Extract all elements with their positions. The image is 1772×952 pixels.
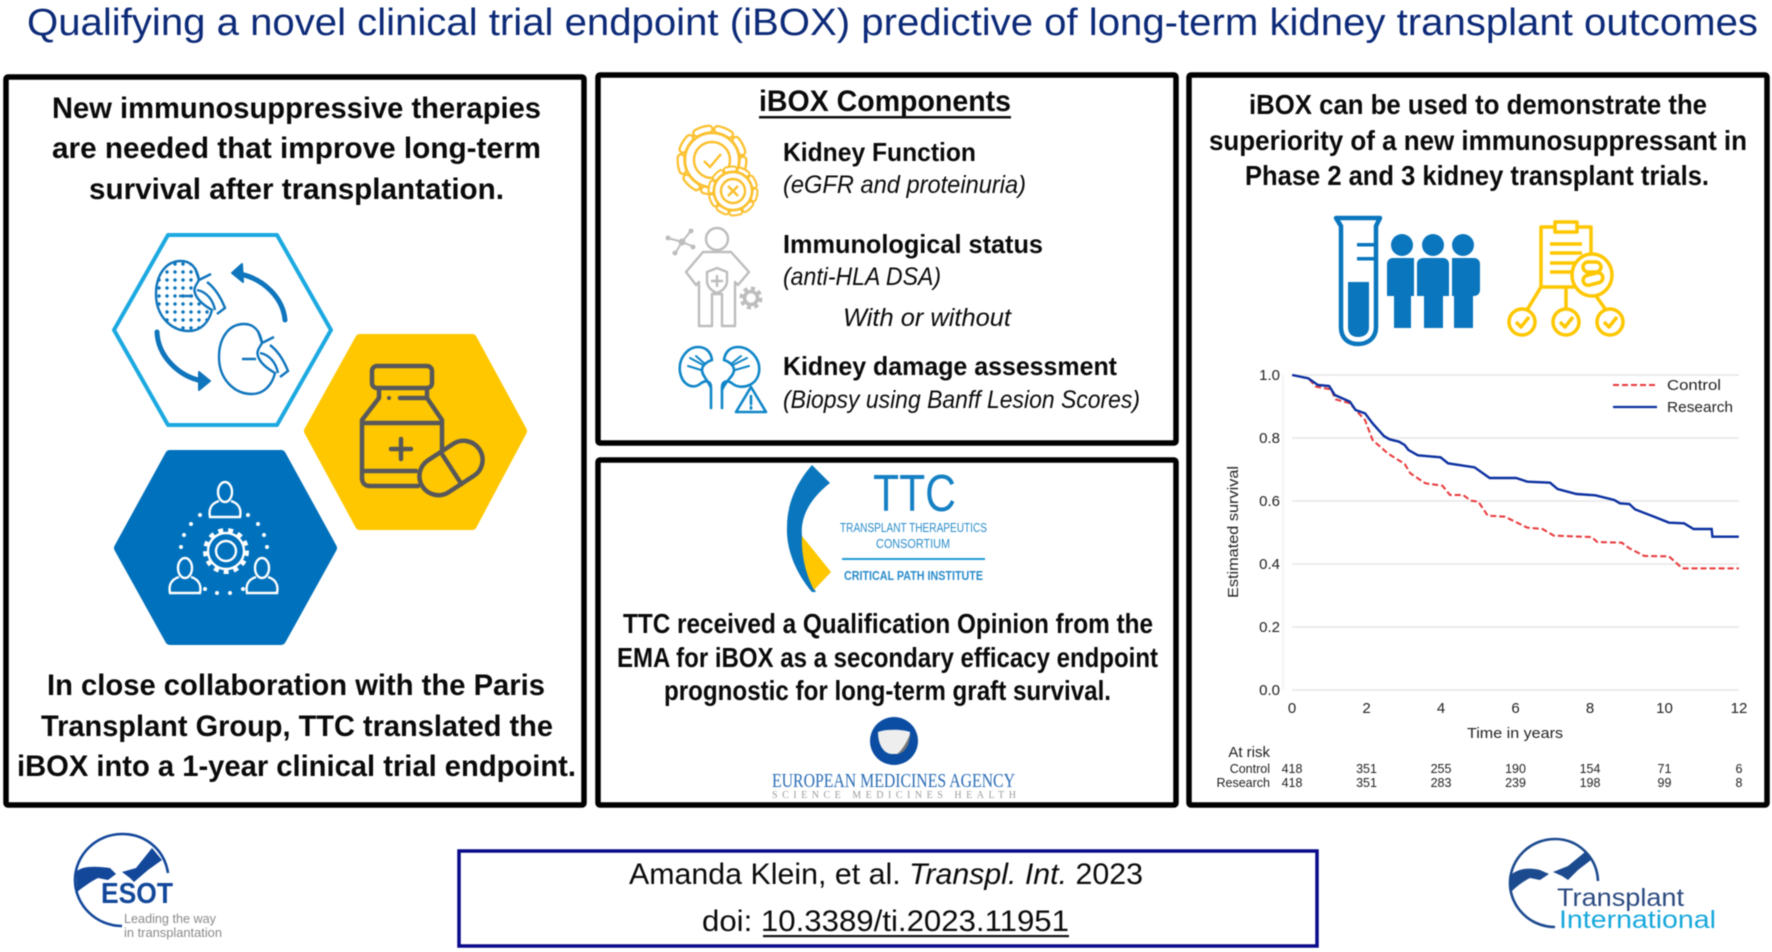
text block: kidney damage assessment: Kidney damage assessment <box>783 351 1117 381</box>
panel: TTC qualification opinion <box>598 460 1176 805</box>
text block: qualification opinion <box>617 608 1158 706</box>
y axis tick labels: 0.4 <box>1259 556 1280 573</box>
citation box <box>459 851 1317 946</box>
at risk table: 99 <box>1658 776 1671 790</box>
panel: need for new therapies <box>6 77 584 805</box>
heading: iBOX Components: iBOX Components <box>759 85 1011 118</box>
logo: ESOT: ESOT <box>101 878 173 910</box>
at risk table: 351 <box>1356 776 1377 790</box>
text block: kidney damage assessment <box>783 351 1140 414</box>
at risk table: 239 <box>1505 776 1526 790</box>
y axis tick labels: 0.0 <box>1259 682 1280 699</box>
x axis tick labels <box>1288 700 1747 717</box>
text block: immunological status: (anti-HLA DSA) <box>783 263 941 291</box>
x axis tick labels: 8 <box>1586 700 1594 717</box>
icon: test tube <box>1336 218 1380 344</box>
legend: Control <box>1667 377 1721 394</box>
text block: kidney function: (eGFR and proteinuria) <box>783 171 1026 199</box>
at risk table: Control <box>1230 762 1270 776</box>
text block: qualification opinion: prognostic for long-term graft survival. <box>664 675 1111 706</box>
y axis tick labels <box>1259 367 1280 699</box>
at risk table: At risk <box>1228 744 1270 761</box>
text block: therapies needed <box>52 92 541 206</box>
text block: superiority: Phase 2 and 3 kidney transplant trials. <box>1245 160 1709 191</box>
text block: therapies needed: are needed that improve long-term <box>52 132 541 165</box>
icon: three people <box>1387 234 1480 328</box>
at risk table: 71 <box>1658 762 1671 776</box>
at risk table: 154 <box>1580 762 1600 776</box>
legend: Research <box>1667 399 1733 416</box>
x axis tick labels: 2 <box>1362 700 1371 717</box>
x axis tick labels: 12 <box>1731 700 1747 717</box>
at risk table: 190 <box>1505 762 1526 776</box>
y axis tick labels: 0.8 <box>1259 430 1280 447</box>
icon: collaboration hexagon <box>119 455 332 640</box>
text block: TTC collaboration: Transplant Group, TTC translated the <box>41 710 553 743</box>
curve: research <box>1292 375 1739 537</box>
icon: kidney exchange hexagon <box>114 235 331 425</box>
legend <box>1613 377 1733 416</box>
icon: person immune status <box>666 228 760 326</box>
text block: kidney function: Kidney Function <box>783 137 976 167</box>
panel: superiority and survival chart <box>1189 75 1767 805</box>
logo: Transplant International: Transplant <box>1557 884 1684 912</box>
panel: iBOX components <box>598 75 1176 443</box>
logo: ESOT: in transplantation <box>124 925 222 940</box>
curve: control <box>1292 375 1739 568</box>
y axis title: Estimated survival <box>1225 466 1242 598</box>
x axis tick labels: 0 <box>1288 700 1296 717</box>
text block: qualification opinion: EMA for iBOX as a secondary efficacy endpoint <box>617 642 1158 673</box>
text block: immunological status: Immunological status <box>783 229 1043 259</box>
at risk table <box>1216 744 1743 790</box>
text block: superiority: iBOX can be used to demonstrate the <box>1249 89 1707 120</box>
doi text: doi: 10.3389/ti.2023.11951 <box>702 905 1069 938</box>
x axis title: Time in years <box>1467 725 1563 742</box>
at risk table: Research <box>1216 776 1270 790</box>
icon: clipboard with pills <box>1509 222 1623 335</box>
at risk table: 6 <box>1736 762 1743 776</box>
at risk table: 198 <box>1580 776 1600 790</box>
logo: Transplant International: International <box>1559 906 1716 934</box>
logo: TTC: TRANSPLANT THERAPEUTICS <box>840 521 987 535</box>
text block: qualification opinion: TTC received a Qualification Opinion from the <box>623 608 1153 639</box>
at risk table: 351 <box>1356 762 1377 776</box>
text block: TTC collaboration <box>17 669 576 783</box>
at risk table: 418 <box>1282 762 1302 776</box>
at risk table: 283 <box>1431 776 1451 790</box>
logo: Transplant International <box>1510 839 1716 934</box>
logo: ESOT <box>75 834 222 940</box>
text block: immunological status <box>783 229 1043 291</box>
logo: TTC <box>787 465 987 592</box>
logo: ESOT: Leading the way <box>124 911 216 926</box>
logo: European Medicines Agency <box>772 717 1016 801</box>
logo: European Medicines Agency: EUROPEAN MEDICINES AGENCY <box>772 770 1015 792</box>
y axis tick labels: 0.2 <box>1259 619 1280 636</box>
icon: medicine hexagon <box>309 339 522 525</box>
text: with or without: With or without <box>843 304 1012 332</box>
text block: superiority <box>1209 89 1747 191</box>
text block: kidney function <box>783 137 1026 199</box>
at risk table: 8 <box>1736 776 1743 790</box>
text block: TTC collaboration: In close collaboration with the Paris <box>47 669 545 702</box>
at risk table: 418 <box>1282 776 1302 790</box>
logo: TTC: TTC <box>873 465 956 523</box>
x axis tick labels: 6 <box>1511 700 1520 717</box>
x axis tick labels: 4 <box>1437 700 1445 717</box>
citation text: Amanda Klein, et al. Transpl. Int. 2023 <box>629 858 1143 891</box>
text block: TTC collaboration: iBOX into a 1-year clinical trial endpoint. <box>17 750 576 783</box>
text block: kidney damage assessment: (Biopsy using Banff Lesion Scores) <box>783 386 1140 414</box>
text block: superiority: superiority of a new immunosuppressant in <box>1209 125 1747 156</box>
icon: kidneys with warning <box>680 347 766 412</box>
text block: therapies needed: New immunosuppressive therapies <box>52 92 541 125</box>
logo: TTC: CONSORTIUM <box>876 537 950 551</box>
logo: European Medicines Agency: SCIENCE MEDICINES HEALTH <box>772 790 1016 801</box>
x axis tick labels: 10 <box>1656 700 1673 717</box>
logo: TTC: CRITICAL PATH INSTITUTE <box>844 569 983 583</box>
y axis tick labels: 0.6 <box>1259 493 1280 510</box>
icon: yellow gears <box>681 129 755 213</box>
at risk table: 255 <box>1431 762 1451 776</box>
title: Qualifying a novel clinical trial endpoint (iBOX) predictive of long-term kidney transplant outcomes <box>27 2 1758 44</box>
chart: Kaplan-Meier survival <box>1216 367 1747 790</box>
text block: therapies needed: survival after transplantation. <box>89 173 504 206</box>
y axis tick labels: 1.0 <box>1259 367 1280 384</box>
